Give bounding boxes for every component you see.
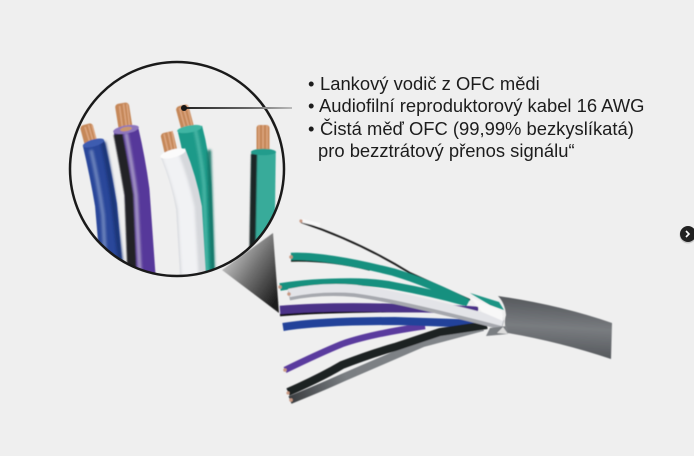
- wire tips: [278, 219, 303, 402]
- wire: teal short: [470, 293, 504, 310]
- wire: white: [159, 131, 193, 275]
- bullet list: Lankový vodič z OFC mědi: [320, 73, 540, 94]
- bullet list: [308, 73, 644, 161]
- wire: white: [289, 288, 503, 325]
- wire: purple lower: [285, 326, 425, 370]
- magnified wires: [80, 102, 276, 275]
- wire: teal upper: [291, 256, 468, 303]
- wire: blue: [283, 321, 487, 327]
- wire: teal: [175, 104, 213, 275]
- wire: blue: [80, 123, 122, 275]
- bullet list: pro bezztrátový přenos signálu“: [318, 140, 575, 161]
- next arrow button: [680, 226, 694, 244]
- cable with fanned-out wires: [278, 219, 612, 402]
- cable sheath: [486, 296, 612, 359]
- wire: purple upper: [280, 307, 478, 315]
- infographic: speaker cable with magnified wires: [68, 60, 694, 404]
- magnifier circle: [70, 62, 284, 276]
- bullet list: •: [308, 95, 314, 116]
- bullet list: •: [308, 118, 314, 139]
- magnifier cone: [222, 233, 279, 313]
- bullet list: Audiofilní reproduktorový kabel 16 AWG: [319, 95, 644, 116]
- wire: teal and black: [251, 125, 276, 270]
- wire: teal middle: [280, 282, 465, 302]
- wire: black: [288, 325, 487, 392]
- bullet list: •: [308, 73, 314, 94]
- wire: grey: [290, 327, 483, 400]
- leader line: [181, 105, 292, 111]
- bullet list: Čistá měď OFC (99,99% bezkyslíkatá): [320, 118, 634, 139]
- white wedge between wires: [470, 297, 503, 321]
- wire: thin black and white: [301, 220, 470, 300]
- wire: purple and black: [113, 102, 143, 275]
